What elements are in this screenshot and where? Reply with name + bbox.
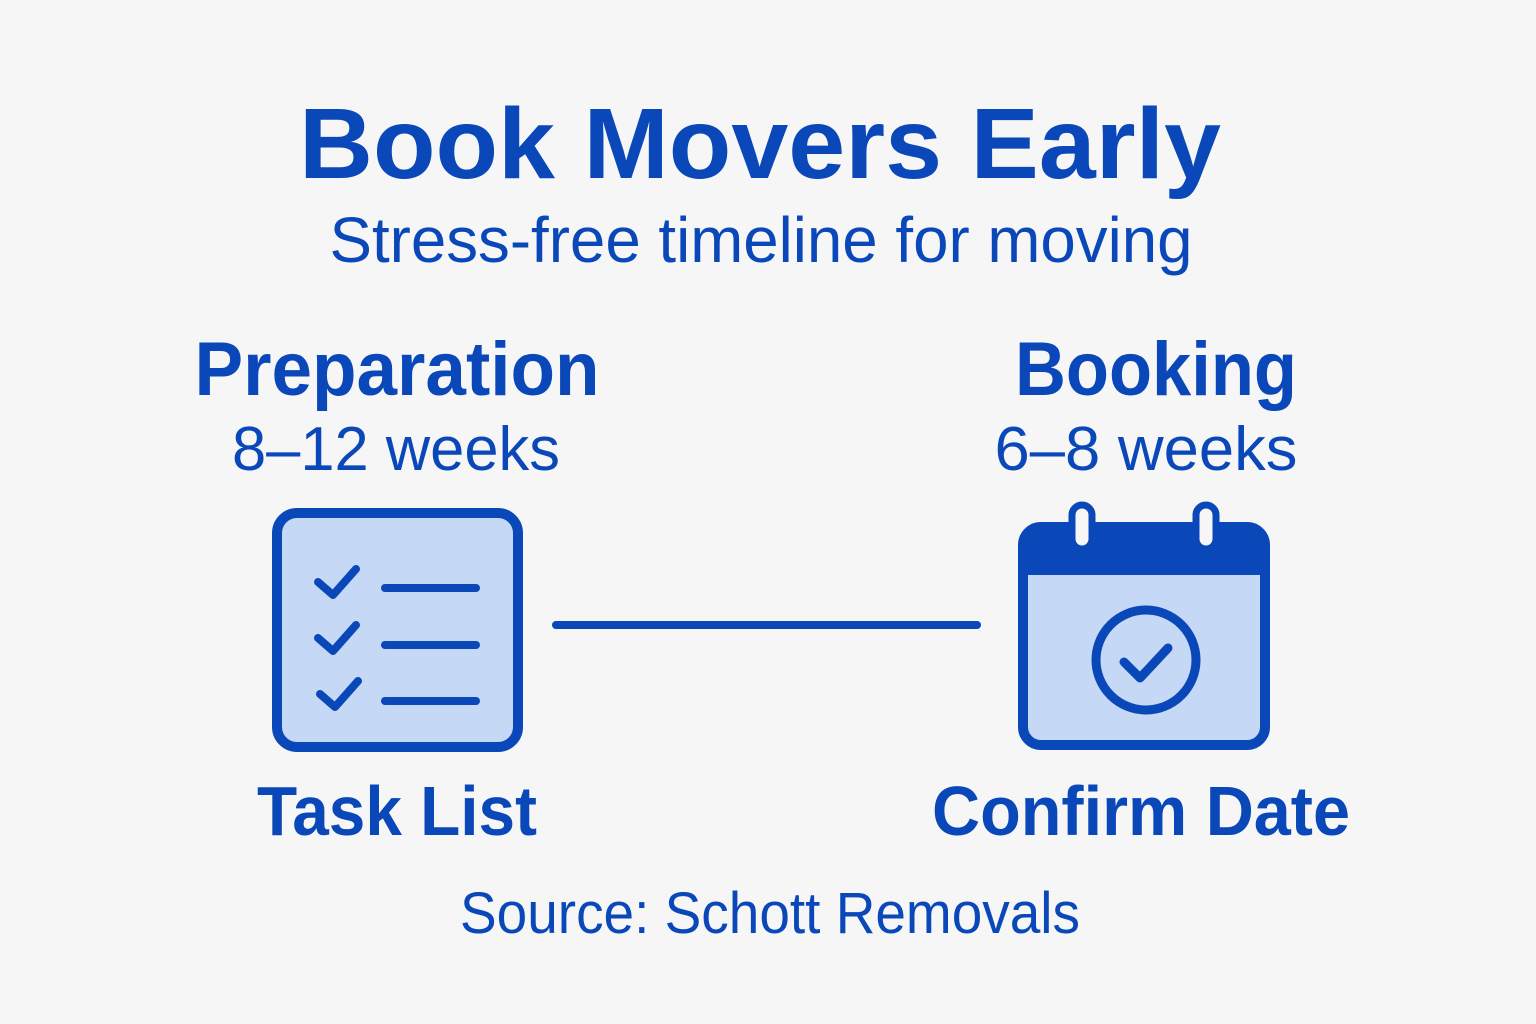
heading: Preparation: Preparation (194, 327, 600, 412)
stage: booking (932, 327, 1350, 850)
label: Task List: Task List (257, 772, 537, 850)
duration: 8–12 weeks: 8–12 weeks (232, 415, 560, 484)
connector line (556, 621, 977, 629)
label: Confirm Date: Confirm Date (932, 772, 1350, 850)
icon: task list (277, 513, 518, 747)
source: Source: Schott Removals (460, 881, 1080, 946)
stage: preparation (194, 327, 600, 850)
heading: Booking: Booking (1015, 327, 1297, 412)
icon: calendar (1023, 505, 1265, 745)
duration: 6–8 weeks: 6–8 weeks (994, 415, 1298, 484)
title: Book Movers Early (299, 88, 1221, 200)
subtitle: Stress-free timeline for moving (330, 204, 1192, 276)
